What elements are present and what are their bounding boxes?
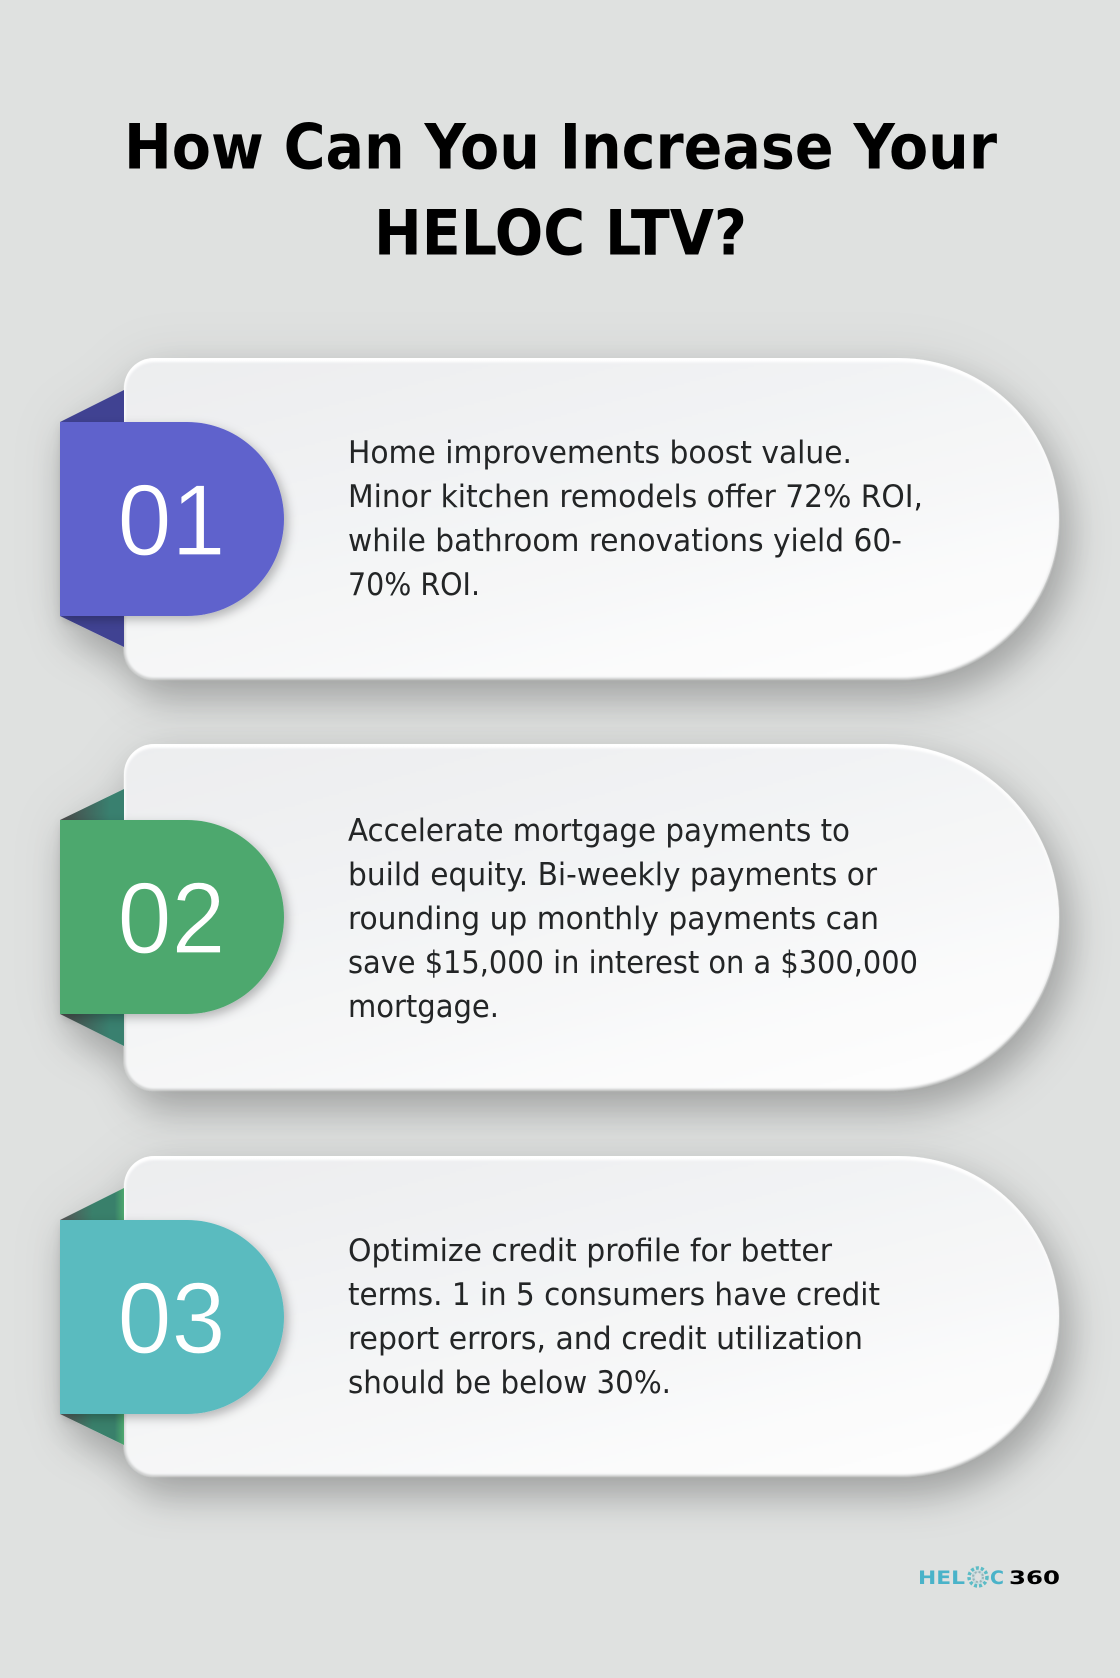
step 2 text: rounding up monthly payments can xyxy=(348,901,879,937)
step 1 text xyxy=(348,435,923,603)
ribbon fold top 3 xyxy=(60,1188,124,1220)
step 3 text: Optimize credit profile for better xyxy=(348,1233,833,1269)
logo: HELOC360: C xyxy=(990,1567,1004,1589)
step 2 text: build equity. Bi-weekly payments or xyxy=(348,857,878,893)
step 2 text: Accelerate mortgage payments to xyxy=(348,813,850,849)
title: HELOC LTV? xyxy=(374,196,747,270)
step 1 text: while bathroom renovations yield 60- xyxy=(348,523,902,559)
card 3 xyxy=(60,1156,1059,1476)
panel: step 1 home improvements xyxy=(60,358,1059,679)
step 1 text: Home improvements boost value. xyxy=(348,435,852,471)
step 2 text xyxy=(348,813,918,1025)
badge 1 xyxy=(60,422,284,616)
panel: step 3 credit profile xyxy=(60,1156,1059,1476)
ribbon fold top 1 xyxy=(60,390,124,422)
step 2 text: save $15,000 in interest on a $300,000 xyxy=(348,945,918,981)
number 03: 03 xyxy=(118,1263,226,1375)
logo: HELOC360: 360 xyxy=(1009,1567,1060,1589)
number 02: 02 xyxy=(118,863,226,975)
badge 3 xyxy=(60,1220,284,1414)
logo: HELOC360 xyxy=(918,1567,1060,1589)
card 1 xyxy=(60,358,1059,679)
step 3 text: should be below 30%. xyxy=(348,1365,671,1401)
step 3 text: report errors, and credit utilization xyxy=(348,1321,863,1357)
title xyxy=(124,110,997,270)
card 2 xyxy=(60,744,1059,1090)
step 1 text: 70% ROI. xyxy=(348,567,480,603)
ribbon fold bottom 3 xyxy=(60,1414,124,1445)
badge 2 xyxy=(60,820,284,1014)
logo: HELOC360: HEL xyxy=(918,1567,965,1589)
icon: swirl O: O xyxy=(971,1567,985,1589)
title: How Can You Increase Your xyxy=(124,110,997,184)
number 01: 01 xyxy=(118,465,226,577)
step 3 text: terms. 1 in 5 consumers have credit xyxy=(348,1277,880,1313)
step 1 text: Minor kitchen remodels offer 72% ROI, xyxy=(348,479,923,515)
step 2 text: mortgage. xyxy=(348,989,499,1025)
ribbon fold bottom 1 xyxy=(60,616,124,647)
step 3 text xyxy=(348,1233,880,1401)
panel: step 2 accelerate payments xyxy=(60,744,1059,1090)
ribbon fold top 2 xyxy=(60,789,124,820)
ribbon fold bottom 2 xyxy=(60,1014,124,1046)
